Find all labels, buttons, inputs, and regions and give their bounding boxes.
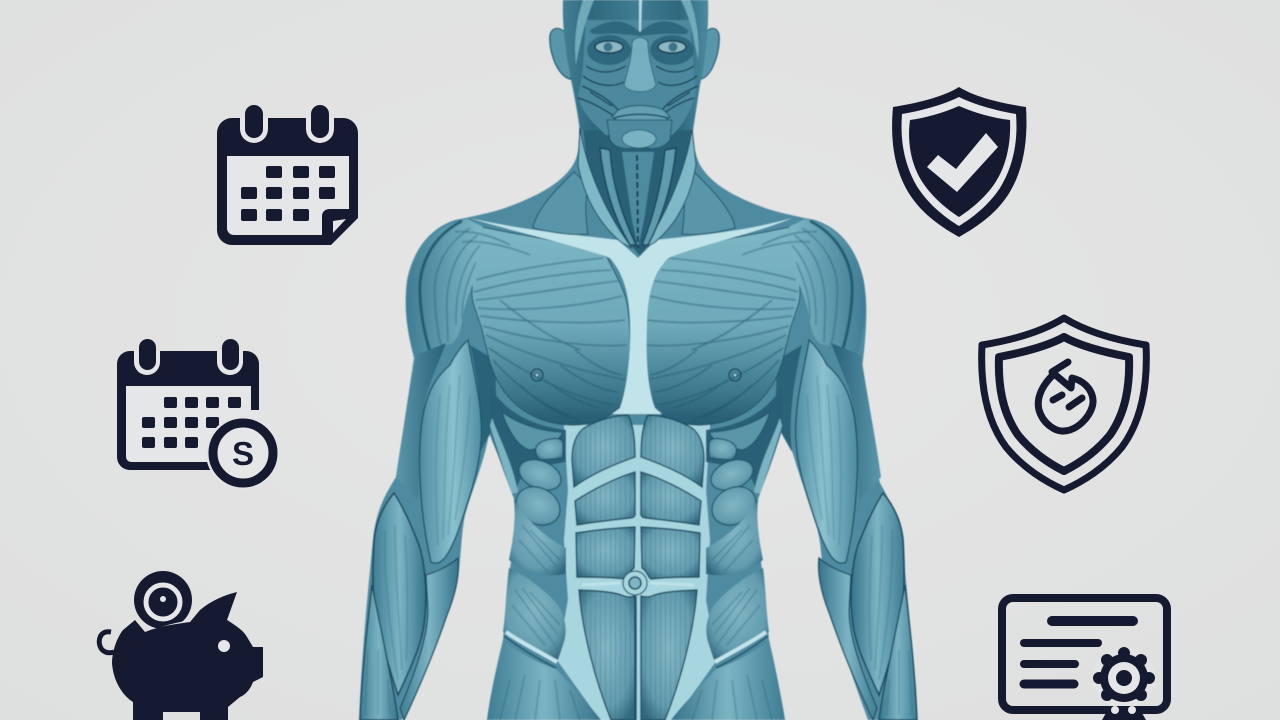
midline (635, 596, 637, 720)
pig tail (99, 632, 114, 653)
navel (623, 571, 647, 595)
temple highlights (575, 0, 699, 63)
icon: piggy bank (99, 571, 263, 720)
sternomastoid right (644, 128, 696, 248)
right arm muscles (796, 340, 917, 720)
left arm muscles (360, 340, 481, 720)
eye right (650, 35, 694, 65)
head (550, 0, 719, 148)
icon: certificate with seal (1002, 598, 1167, 720)
ear right (700, 28, 719, 79)
throat strands left (600, 148, 636, 245)
chin (607, 120, 672, 148)
abdominal muscles left (572, 415, 635, 720)
neck (533, 128, 735, 256)
nose (624, 38, 656, 92)
mouth (612, 106, 670, 127)
abdominal connective tissue (557, 425, 717, 720)
face (578, 20, 696, 135)
eye left (587, 35, 631, 65)
icon: calendar (217, 105, 358, 245)
icon: calendar with dollar coin: S (232, 435, 254, 472)
right torso muscles (642, 219, 866, 720)
sternomastoid left (578, 128, 632, 248)
coin (134, 571, 192, 629)
left torso muscles (406, 219, 630, 720)
coin slot gap (120, 618, 205, 640)
ear left (550, 28, 572, 79)
midline scalp (639, 0, 642, 32)
icon: shield with leaf (982, 318, 1146, 490)
trapezius left (533, 172, 588, 235)
throat strands right (642, 148, 676, 245)
forehead (590, 21, 688, 36)
icon: calendar with dollar coin (117, 339, 280, 490)
sternum (470, 218, 792, 414)
cheek lines (578, 66, 698, 116)
trapezius right (682, 172, 735, 235)
abdominal muscles right (641, 415, 704, 720)
seal (1093, 647, 1155, 720)
throat centre (622, 152, 654, 248)
tendinous line (582, 583, 694, 585)
throat (583, 130, 692, 256)
anatomical figure (359, 0, 917, 720)
pig body (112, 592, 263, 720)
icon: shield with check (892, 87, 1026, 237)
pig eye (218, 640, 230, 652)
skull (563, 0, 708, 130)
body silhouette (359, 0, 917, 720)
